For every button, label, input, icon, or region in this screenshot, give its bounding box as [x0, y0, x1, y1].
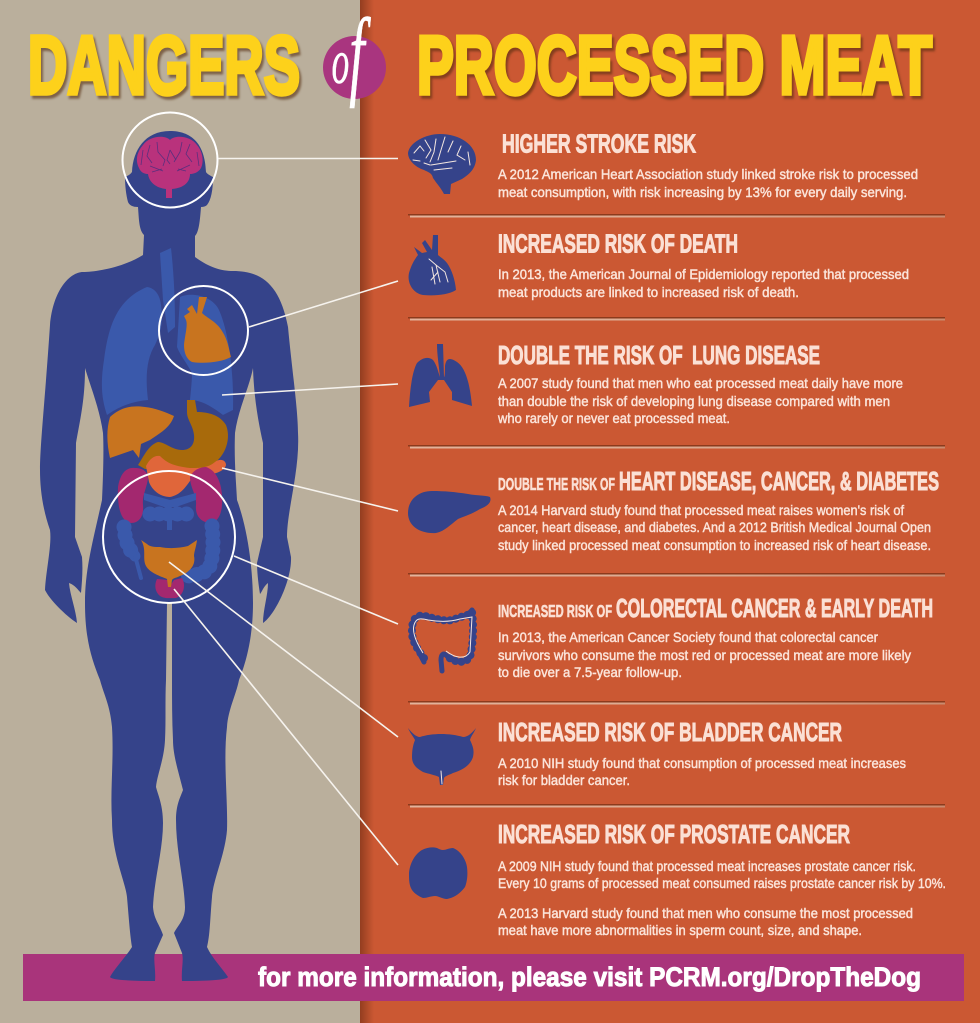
callout circles: [103, 112, 248, 603]
panel: left beige background: [0, 0, 360, 1023]
heading: DOUBLE THE RISK OF: [498, 474, 615, 494]
panel: stroke risk: [408, 130, 918, 200]
text block: [498, 755, 906, 788]
organ: stomach: [138, 400, 228, 470]
heading: [498, 468, 939, 496]
text block: [498, 166, 918, 200]
organ: lungs: [102, 248, 233, 415]
heading: INCREASED RISK OF: [498, 601, 612, 621]
text block: cancer, heart disease, and diabetes. And a 2012 British Medical Journal Open: [498, 519, 931, 535]
icon: pancreas: [408, 491, 491, 533]
text block: meat have more abnormalities in sperm count, size, and shape.: [498, 922, 862, 938]
title badge: of: [323, 0, 386, 109]
text block: to die over a 7.5-year follow-up.: [498, 664, 682, 680]
organ: liver: [107, 406, 174, 458]
icon: brain: [408, 134, 476, 194]
icon: bladder: [408, 728, 476, 785]
text block: meat consumption, with risk increasing by 13% for every daily serving.: [498, 184, 907, 200]
panel: heart disease, cancer, diabetes: [408, 468, 939, 553]
title badge: of: o: [332, 27, 349, 98]
text block: A 2009 NIH study found that processed meat increases prostate cancer risk.: [498, 858, 916, 874]
text block: In 2013, the American Journal of Epidemiology reported that processed: [498, 266, 909, 282]
text block: [498, 858, 946, 938]
text block: A 2013 Harvard study found that men who consume the most processed: [498, 905, 913, 921]
organ: heart: [184, 297, 231, 363]
organ: colon: [124, 526, 213, 578]
title word: dangers: DANGERS: [28, 18, 300, 112]
text block: [497, 375, 903, 426]
panel: lung disease: [409, 342, 903, 426]
callout lines: [169, 158, 398, 865]
heading: INCREASED RISK OF DEATH: [498, 230, 738, 258]
text block: who rarely or never eat processed meat.: [497, 410, 730, 426]
human body figure: [40, 131, 298, 981]
text block: In 2013, the American Cancer Society found that colorectal cancer: [498, 629, 878, 645]
text block: survivors who consume the most red or processed meat are more likely: [498, 647, 911, 663]
section dividers: [408, 214, 945, 808]
text block: meat products are linked to increased risk of death.: [498, 284, 799, 300]
panel: colorectal cancer: [412, 595, 933, 680]
text block: [498, 266, 909, 300]
footer bar background: [23, 954, 964, 1001]
heading: HIGHER STROKE RISK: [502, 130, 696, 158]
icon: heart: [409, 235, 456, 295]
footer text: for more information, please visit PCRM.org/DropTheDog: [258, 962, 921, 992]
text block: A 2010 NIH study found that consumption of processed meat increases: [498, 755, 906, 771]
organ: small intestine: [144, 493, 196, 530]
organ: pancreas: [146, 456, 226, 497]
text block: study linked processed meat consumption to increased risk of heart disease.: [498, 537, 931, 553]
heading: [498, 595, 933, 623]
title badge: of: f: [349, 0, 371, 109]
icon: colon: [412, 610, 473, 671]
text block: A 2014 Harvard study found that processed meat raises women's risk of: [498, 502, 904, 518]
panel: prostate cancer: [409, 821, 946, 938]
text block: A 2007 study found that men who eat processed meat daily have more: [498, 375, 903, 391]
organ: bladder: [141, 540, 197, 587]
organ: kidneys: [118, 467, 222, 523]
heading: DOUBLE THE RISK OF LUNG DISEASE: [498, 342, 820, 370]
panel: right orange background: [360, 0, 980, 1023]
icon: lungs: [409, 344, 472, 407]
panel: bladder cancer: [408, 719, 906, 788]
organ: brain: [137, 137, 203, 198]
body silhouette: [40, 131, 298, 981]
text block: than double the risk of developing lung disease compared with men: [498, 393, 890, 409]
panel: risk of death: [409, 230, 909, 300]
text block: [498, 502, 931, 553]
text block: risk for bladder cancer.: [498, 772, 630, 788]
icon: prostate: [409, 847, 467, 899]
text block: A 2012 American Heart Association study linked stroke risk to processed: [498, 166, 918, 182]
text block: [498, 629, 911, 680]
organ: prostate: [155, 578, 184, 598]
title: [28, 0, 932, 111]
